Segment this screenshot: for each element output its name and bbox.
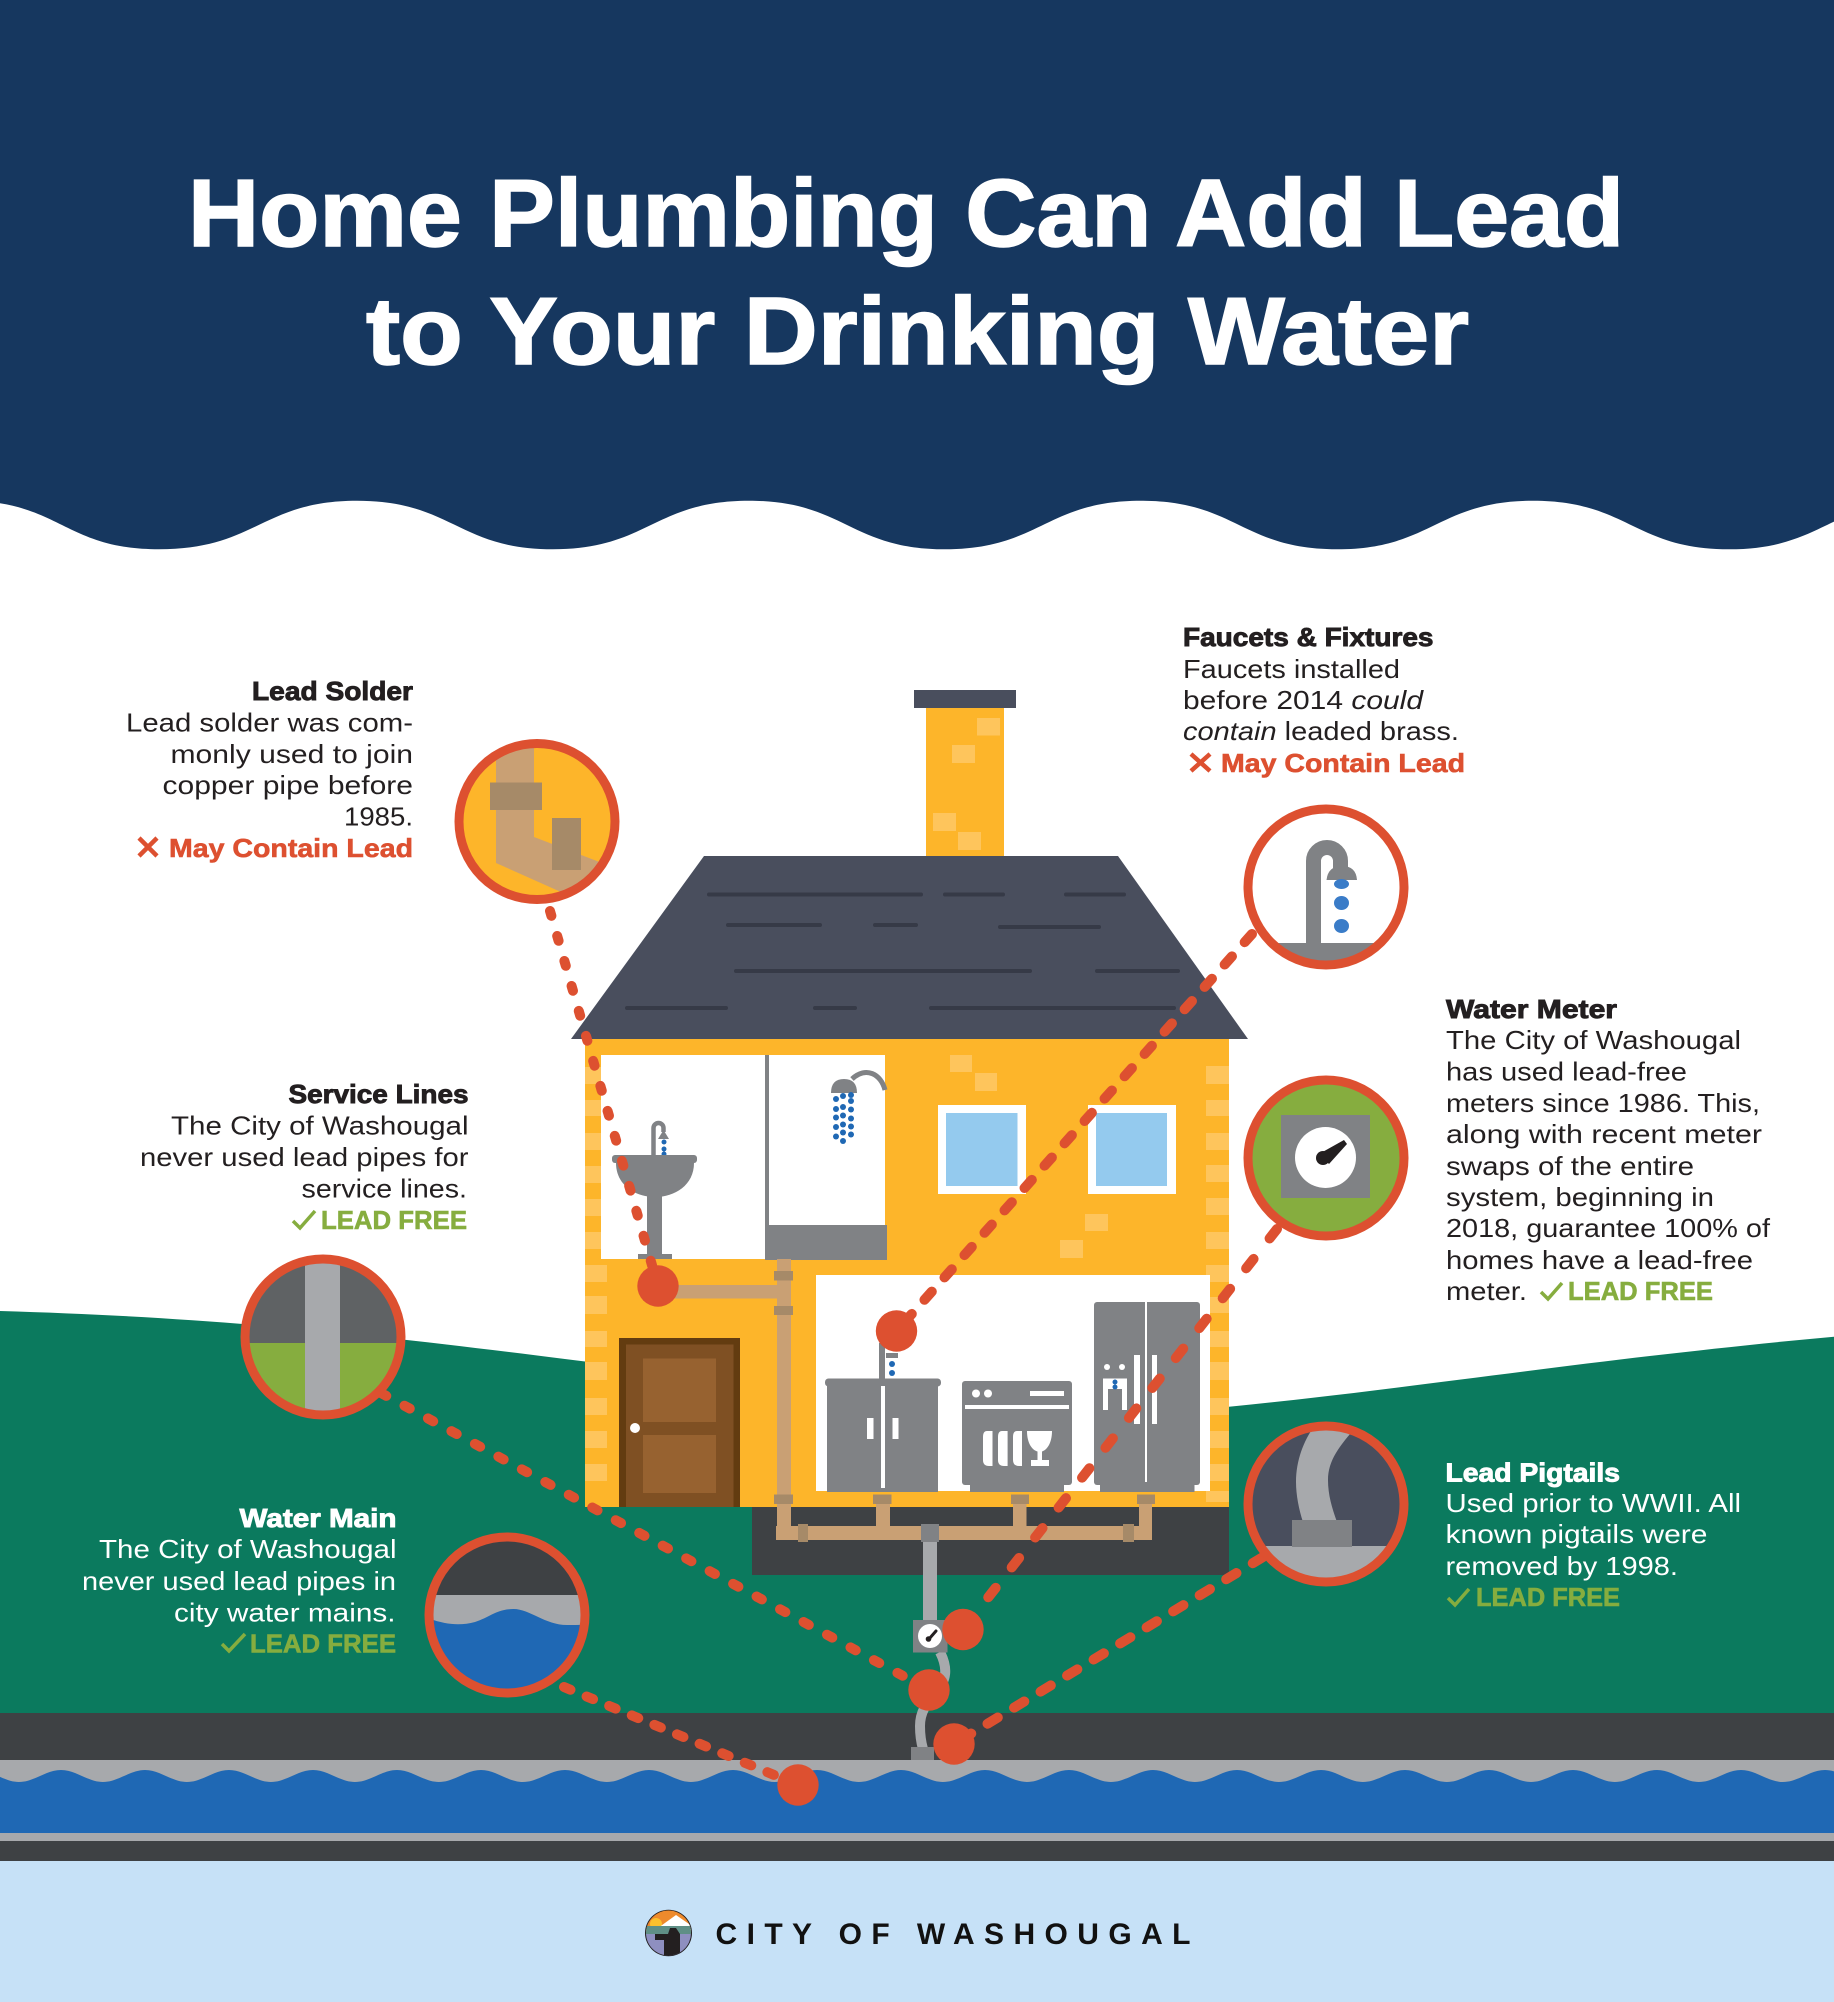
green hill: [0, 1311, 1834, 1714]
kitchen: [816, 1275, 1210, 1492]
text: lead solder: 1985.: [344, 802, 413, 832]
service line and meter: [911, 1524, 948, 1760]
roof: [571, 856, 1248, 1039]
text: water main: The City of Washougal: [99, 1534, 396, 1564]
text: water main: Water Main: [240, 1503, 396, 1533]
text: faucets and fixtures: before 2014 could: [1183, 685, 1425, 715]
text: water meter: [1446, 994, 1771, 1306]
text: faucets and fixtures: contain leaded brass.: [1183, 716, 1459, 746]
door: [619, 1338, 740, 1507]
text: service lines: service lines.: [302, 1174, 467, 1204]
text: water meter: meter.: [1446, 1276, 1527, 1306]
text: lead pigtails: [1446, 1458, 1741, 1612]
text: faucets and fixtures: May Contain Lead: [1221, 748, 1465, 778]
icon: check mark: [1448, 1589, 1469, 1605]
text: lead solder: [126, 676, 413, 863]
meter: [913, 1620, 948, 1652]
inset: lead pigtails: [1240, 1425, 1410, 1591]
chimney: [914, 690, 1016, 857]
kitchen sink cabinet: [825, 1343, 941, 1492]
text: water main: never used lead pipes in: [82, 1566, 396, 1596]
title: to Your Drinking Water: [366, 278, 1469, 385]
title: Home Plumbing Can Add Lead: [188, 160, 1624, 267]
callout dots: [637, 1265, 984, 1806]
icon: x mark: [1191, 754, 1210, 771]
text: service lines: never used lead pipes for: [140, 1142, 469, 1172]
text: water meter: The City of Washougal: [1446, 1025, 1741, 1055]
text: faucets and fixtures: Faucets & Fixtures: [1183, 622, 1434, 652]
house wall: [585, 1039, 1229, 1507]
bathroom sink: [612, 1123, 697, 1259]
text: service lines: Service Lines: [288, 1079, 468, 1109]
copper plumbing: [672, 1259, 1155, 1542]
text: water meter: swaps of the entire: [1446, 1151, 1694, 1181]
text: lead pigtails: removed by 1998.: [1446, 1551, 1678, 1581]
text: lead pigtails: Used prior to WWII. All: [1446, 1488, 1741, 1518]
text: water meter: has used lead-free: [1446, 1056, 1687, 1086]
title: [188, 160, 1624, 385]
text: water main: LEAD FREE: [250, 1628, 396, 1658]
foundation: [752, 1506, 1229, 1575]
icon: check mark: [293, 1211, 315, 1228]
text: faucets and fixtures: Faucets installed: [1183, 654, 1400, 684]
text: lead solder: monly used to join: [170, 739, 413, 769]
footer band: [0, 1861, 1834, 2002]
windows: [938, 1105, 1176, 1194]
inset: faucet: [1240, 809, 1410, 973]
text: water meter: meters since 1986. This,: [1446, 1088, 1760, 1118]
underground: road, pipe and water main: [0, 1713, 1834, 1861]
text: lead pigtails: Lead Pigtails: [1446, 1458, 1620, 1488]
inset: water main: [425, 1533, 595, 1700]
text: lead solder: Lead Solder: [252, 676, 413, 706]
footer city name: CITY OF WASHOUGAL: [716, 1918, 1190, 1951]
text: water meter: system, beginning in: [1446, 1182, 1714, 1212]
text: water meter: homes have a lead-free: [1446, 1245, 1753, 1275]
text: service lines: LEAD FREE: [321, 1205, 467, 1235]
text: water main: [82, 1503, 396, 1658]
text: faucets and fixtures: [1183, 622, 1465, 778]
text: water meter: 2018, guarantee 100% of: [1446, 1213, 1771, 1243]
text: service lines: [140, 1079, 469, 1235]
text: water meter: LEAD FREE: [1568, 1276, 1713, 1306]
inset: service line: [240, 1255, 410, 1425]
text: lead solder: Lead solder was com-: [126, 708, 413, 738]
inset: lead solder: [459, 730, 615, 905]
header wave banner: [0, 0, 1834, 549]
text: lead solder: May Contain Lead: [169, 833, 413, 863]
icon: x mark: [139, 838, 157, 856]
text: lead pigtails: LEAD FREE: [1476, 1582, 1620, 1612]
icon: check mark: [222, 1634, 245, 1651]
text: water meter: Water Meter: [1446, 994, 1617, 1024]
bathroom: [601, 1055, 887, 1260]
bathtub: [765, 1225, 887, 1260]
callout lines: [381, 911, 1277, 1785]
refrigerator: [1094, 1302, 1200, 1492]
dishwasher: [962, 1381, 1072, 1492]
text: water meter: along with recent meter: [1446, 1119, 1762, 1149]
city logo: [645, 1910, 693, 1957]
text: lead pigtails: known pigtails were: [1446, 1519, 1708, 1549]
inset: water meter: [1248, 1080, 1404, 1236]
house: [571, 690, 1248, 1575]
text: service lines: The City of Washougal: [171, 1110, 468, 1140]
text: lead solder: copper pipe before: [162, 770, 413, 800]
shower: [831, 1073, 885, 1144]
text: water main: city water mains.: [174, 1598, 396, 1628]
icon: check mark: [1541, 1283, 1562, 1299]
